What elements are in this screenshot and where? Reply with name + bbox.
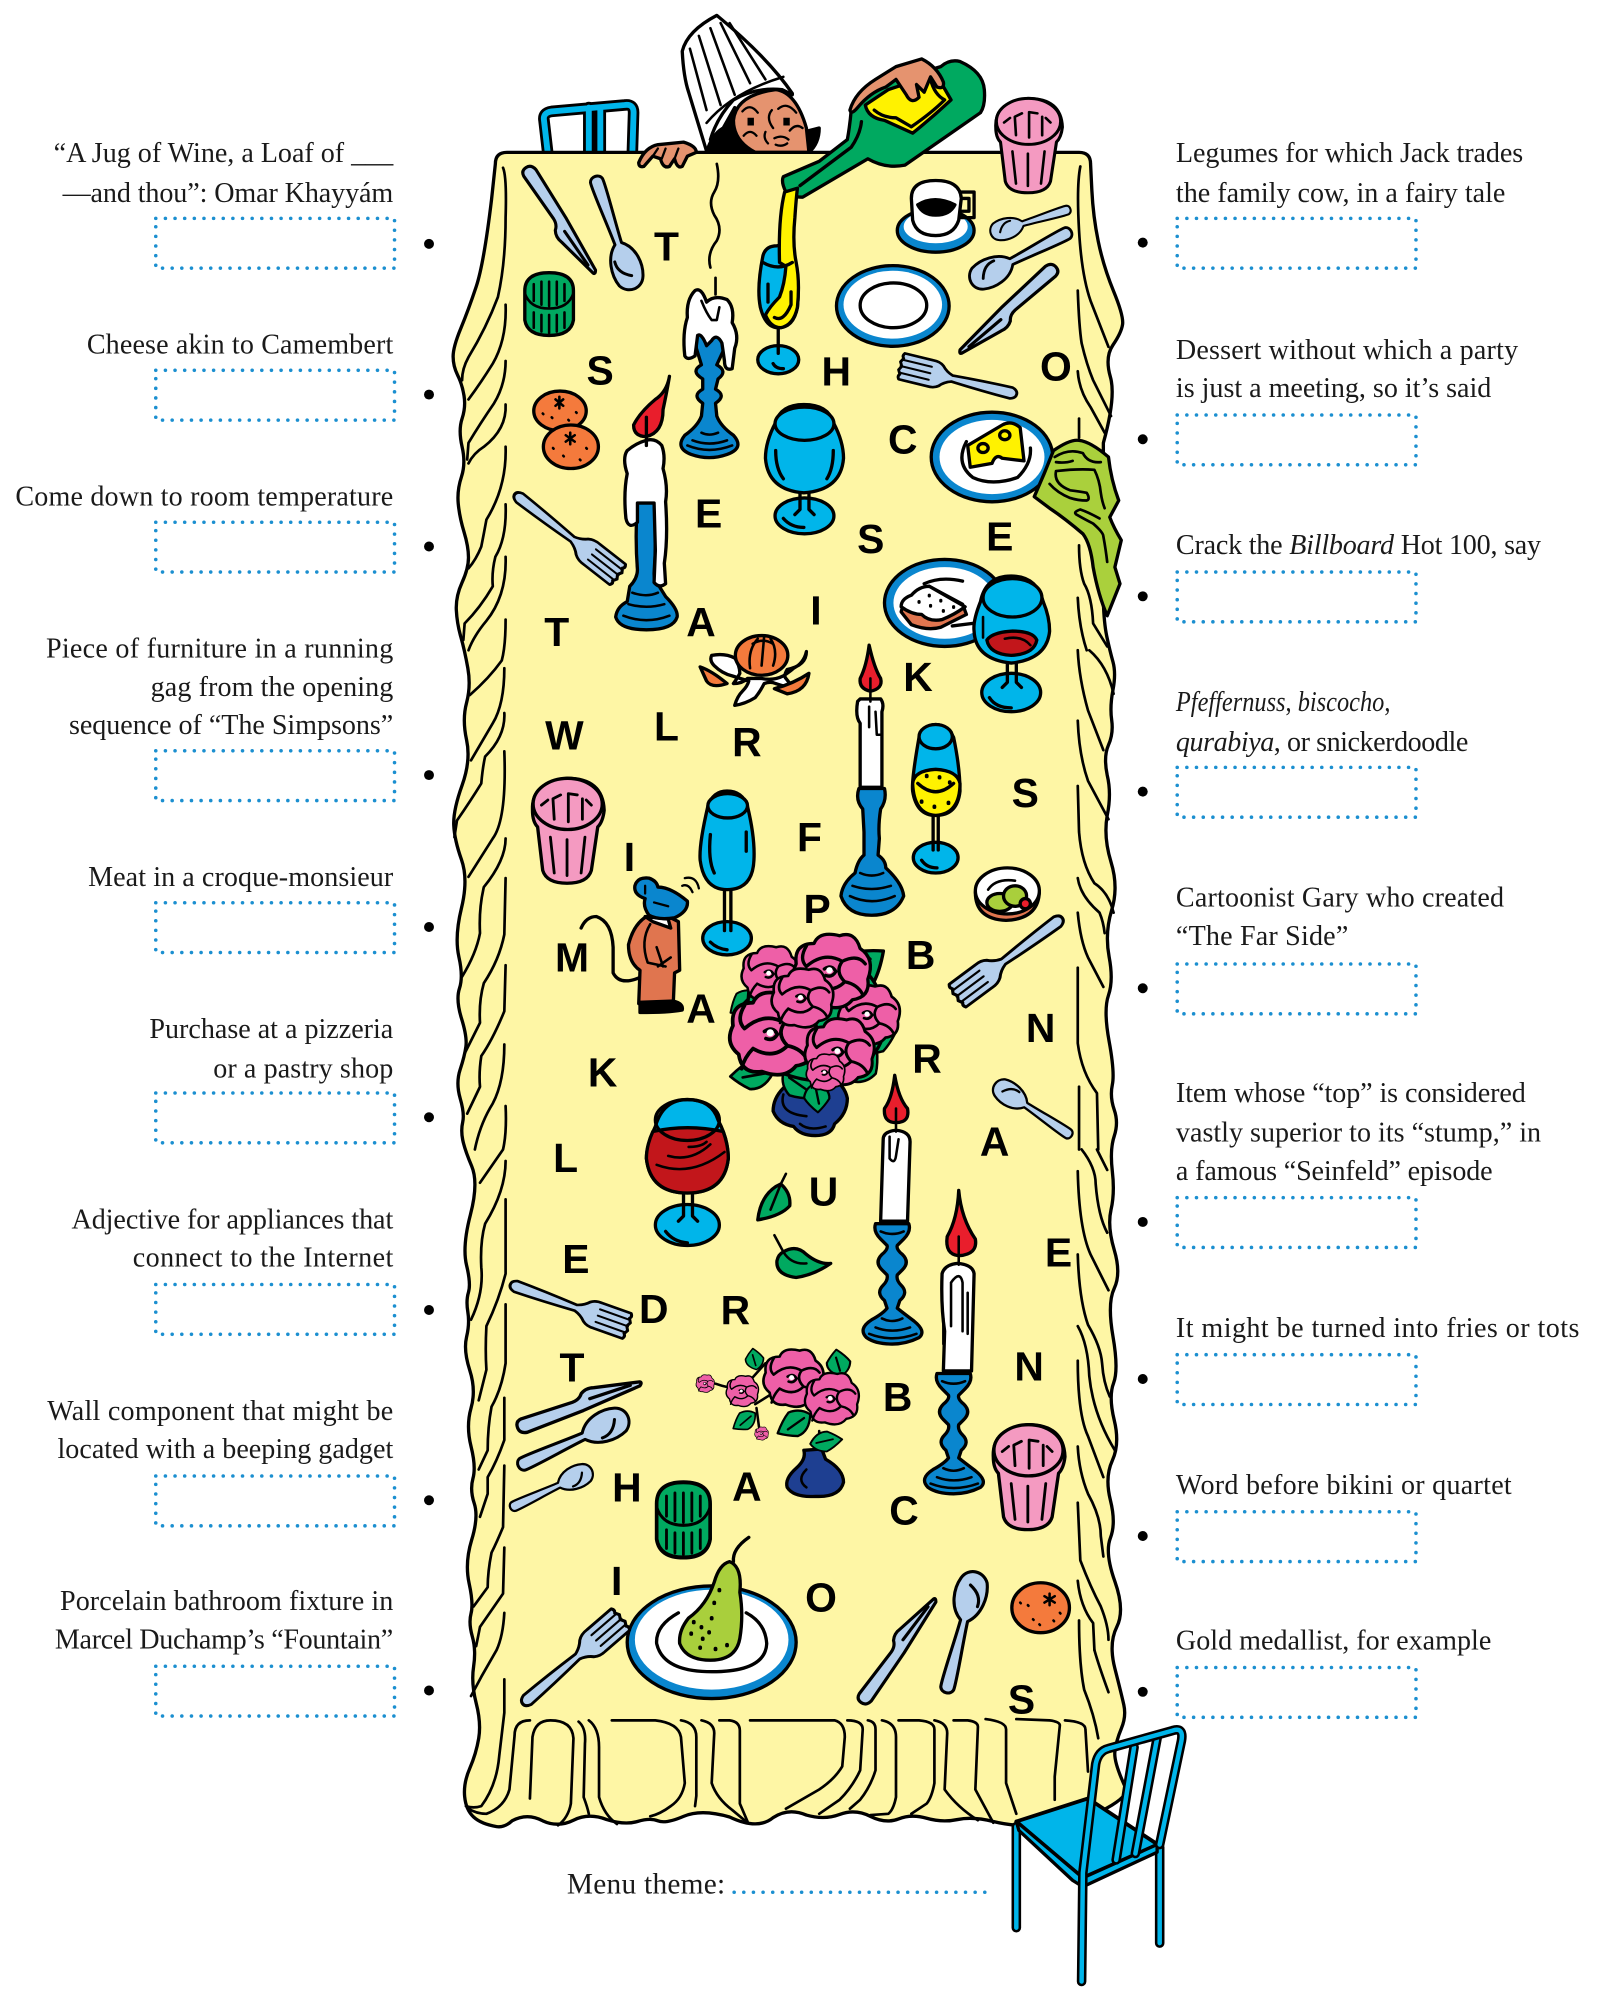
chef's hand on table [639,142,696,167]
hidden letters on the table: S [1012,770,1039,816]
clue: cookies: Pfeffernuss, biscocho, [1175,687,1390,718]
hidden letters on the table: T [544,609,569,655]
clue: beeping gadget: Wall component that might be [47,1396,393,1427]
hidden letters on the table: C [889,1488,919,1534]
hidden letters on the table: P [804,886,831,932]
clue: gold medallist: Gold medallist, for example [1176,1626,1491,1657]
hidden letters on the table: D [639,1286,668,1332]
clue: The Far Side [1138,883,1504,1014]
clue: pizzeria purchase: Purchase at a pizzeria [149,1014,394,1045]
clue: Jug of Wine: —and thou”: Omar Khayyám [62,178,393,209]
hidden letters on the table: N [1014,1343,1044,1389]
knife lower left [513,1371,644,1435]
fork left middle [507,484,628,586]
hidden letters on the table: U [809,1168,838,1214]
clue: Seinfeld top [1138,1078,1541,1247]
spoons lower left [505,1402,634,1518]
hidden letters on the table: I [810,587,822,633]
green tumbler lower [657,1482,710,1558]
spoons and knife top right [955,199,1078,362]
clue: Simpsons furniture: sequence of “The Simpsons” [69,710,393,741]
tablecloth bottom pleats [468,1719,1088,1825]
clue: Come down to room temperature: Come down to room temperature [15,482,393,513]
orange bottom right [1012,1583,1069,1633]
clue: Jack's legumes: Legumes for which Jack trades [1176,138,1523,169]
blue vase [773,1078,847,1136]
hidden letters on the table: S [586,347,614,393]
clue: fries or tots [1138,1313,1579,1405]
clue: party dessert: Dessert without which a party [1176,335,1518,366]
clue: Duchamp Fountain: Marcel Duchamp’s “Fountain” [55,1624,393,1655]
hidden letters on the table: B [906,932,935,978]
clue: party dessert: is just a meeting, so it’s said [1176,373,1491,404]
smoke line [709,164,719,294]
clue: pizzeria purchase: or a pastry shop [213,1054,393,1085]
hidden letters on the table: M [555,935,589,981]
hidden letters on the table: E [695,490,722,536]
hidden letters on the table: E [562,1236,589,1282]
fork lower left [506,1272,633,1339]
hidden letters on the table: O [1040,344,1072,390]
loose leaves [758,1174,831,1277]
hidden letters on the table: S [1008,1677,1035,1723]
tall candle lower right [925,1190,983,1494]
cheese on plate [931,412,1053,502]
clue: fries or tots: It might be turned into fries or tots [1176,1313,1579,1344]
hidden letters on the table [544,224,1072,1723]
flute with pouring oil [758,188,799,374]
knife and spoon bottom right [851,1568,991,1707]
coffee cup on saucer [897,181,974,252]
hidden letters on the table: T [560,1345,585,1391]
menu theme answer line: Menu theme: [567,1869,725,1901]
chair back behind table [544,105,634,154]
clue: Billboard Hot 100: Crack the Billboard Hot 100, say [1176,530,1541,561]
hidden letters on the table: H [612,1465,642,1511]
hidden letters on the table: R [732,719,762,765]
clue: party dessert [1138,335,1518,465]
hidden letters on the table: A [732,1463,762,1509]
clue: bikini or quartet [1138,1470,1512,1562]
hidden letters on the table: A [686,986,716,1032]
bowl of olives [975,868,1039,920]
small blue vase with roses [696,1347,859,1497]
pink tumbler lower right [993,1425,1065,1530]
hidden letters on the table: W [545,713,584,759]
tablecloth outline [453,152,1126,1827]
tall candle with red flame [616,376,677,630]
hidden letters on the table: I [611,1558,622,1604]
hidden letters on the table: O [805,1574,837,1620]
hidden letters on the table: K [588,1050,618,1096]
hidden letters on the table: N [1026,1005,1055,1051]
wine glass full of red [646,1100,728,1245]
peeled clementine [700,636,809,705]
clue: Jug of Wine: “A Jug of Wine, a Loaf of ___ [54,138,394,169]
hidden letters on the table: B [883,1374,912,1420]
hidden letters on the table: T [654,224,679,270]
clue: Jack's legumes [1138,138,1523,268]
blue chair [1016,1730,1182,1981]
clue: Duchamp Fountain [55,1586,434,1716]
clue: Seinfeld top: Item whose “top” is considered [1176,1078,1526,1109]
clue: connected appliances [72,1204,434,1334]
champagne flute with yellow [912,725,960,873]
tablecloth fold lines [454,166,1115,1807]
hidden letters on the table: S [857,516,884,562]
hidden letters on the table: A [686,599,716,645]
plate with pear [627,1537,796,1699]
clue: Jug of Wine [54,138,434,268]
hidden letters on the table: C [888,416,917,462]
cyan flute [700,791,754,955]
clue: Duchamp Fountain: Porcelain bathroom fixture in [60,1586,393,1617]
pink tumbler top right [996,98,1062,193]
hidden letters on the table: I [624,834,635,880]
hidden letters on the table: E [986,513,1013,559]
hidden letters on the table: R [721,1287,750,1333]
candle on beaded stem [863,1075,922,1344]
clue: beeping gadget [47,1396,434,1526]
clue: The Far Side: “The Far Side” [1176,921,1348,952]
wine glass with red wine [974,576,1050,712]
mouse waiter [581,878,699,1013]
melted candle [681,290,738,458]
green napkin [1034,440,1121,616]
clue: Cheese akin to Camembert [87,330,434,420]
hidden letters on the table: H [822,349,851,395]
hidden letters on the table: F [797,815,822,861]
clue: Seinfeld top: vastly superior to its “stump,” in [1176,1117,1541,1148]
spoon by vase [988,1075,1078,1146]
clue: The Far Side: Cartoonist Gary who created [1176,883,1504,914]
hidden letters on the table: R [912,1036,942,1082]
hidden letters on the table: L [553,1135,578,1181]
bottle of oil poured by hand [783,59,985,197]
pair of oranges [534,391,598,469]
fork by pear plate [513,1607,632,1715]
hidden letters on the table: E [1045,1230,1072,1276]
hidden letters on the table: L [654,704,679,750]
empty plate [836,266,949,346]
clue: gold medallist [1138,1626,1491,1717]
clue: cookies [1138,687,1468,817]
green tumbler [525,273,573,335]
bouquet of pink roses [724,934,902,1113]
fork near plate [896,353,1020,407]
clue: connected appliances: connect to the Internet [133,1243,393,1274]
clue: Cheese akin to Camembert: Cheese akin to Camembert [87,330,393,361]
cyan goblet [765,405,844,534]
hidden letters on the table: A [980,1119,1009,1165]
clue: Simpsons furniture [46,634,434,801]
knife top left [516,164,601,280]
clue: Simpsons furniture: Piece of furniture in a running [46,634,393,665]
clue: Billboard Hot 100 [1138,530,1541,622]
clue: Seinfeld top: a famous “Seinfeld” episode [1176,1156,1493,1187]
toast on plate [884,559,1005,646]
clue: Come down to room temperature [15,482,434,572]
clue: bikini or quartet: Word before bikini or quartet [1176,1470,1512,1501]
clue: croque-monsieur: Meat in a croque-monsieur [88,862,394,893]
clue: connected appliances: Adjective for appliances that [72,1204,393,1235]
clue: cookies: qurabiya, or snickerdoodle [1176,727,1468,758]
clue: Simpsons furniture: gag from the opening [151,672,393,703]
chef peeking over table [682,15,819,152]
hidden letters on the table: K [903,654,933,700]
clue: beeping gadget: located with a beeping gadget [57,1434,393,1465]
candle with short wax [841,645,904,915]
clue: Jack's legumes: the family cow, in a fairy tale [1176,178,1505,209]
clue: croque-monsieur [88,862,434,953]
pink tumbler middle [532,778,604,883]
clue: pizzeria purchase [149,1014,434,1143]
fork by bowl [947,907,1071,1009]
spoon top left [581,172,648,294]
